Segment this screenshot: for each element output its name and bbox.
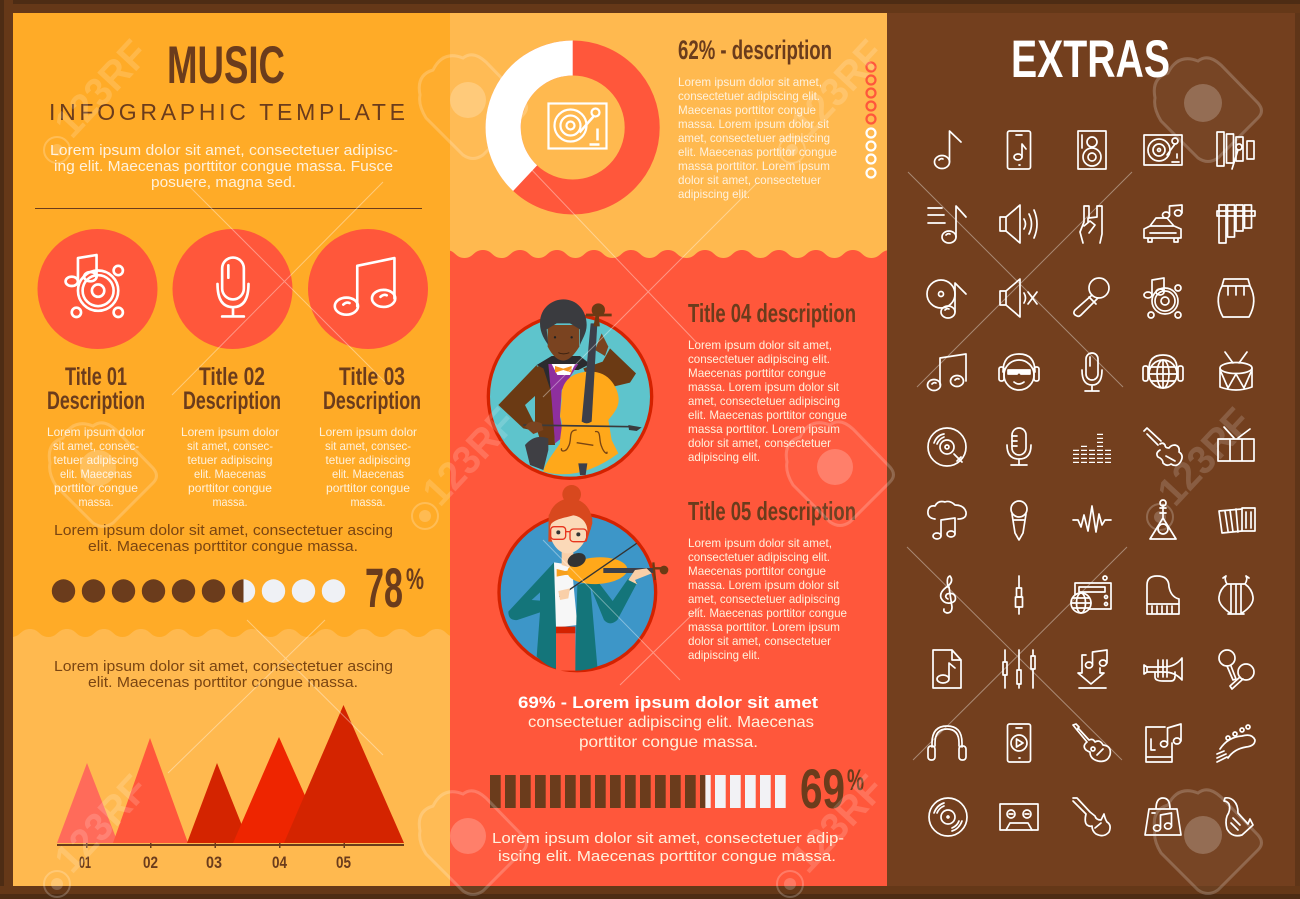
intro text: ing elit. Maecenas porttitor congue massa. Fusce bbox=[54, 158, 393, 175]
column 03 text: porttitor congue bbox=[326, 481, 410, 495]
column 01 text: tetuer adipiscing bbox=[54, 453, 138, 467]
icon: vintage microphone bbox=[1007, 428, 1031, 465]
text block: title 05 bbox=[688, 536, 847, 662]
icon circle 03: double music note bbox=[308, 229, 428, 349]
column 02 text: massa. bbox=[212, 495, 248, 509]
icon: trumpet bbox=[1144, 658, 1182, 681]
text block: title 04: dolor sit amet, consectetuer bbox=[688, 436, 831, 450]
column 03 text bbox=[319, 363, 421, 509]
watermark: stock photo marks: 123RF bbox=[46, 767, 157, 881]
icon: music note bbox=[934, 131, 961, 168]
icon: turntable bbox=[548, 104, 606, 148]
icon: cassette bbox=[1000, 804, 1038, 830]
illustration: violinist bbox=[499, 485, 668, 671]
icon: turntable bbox=[1144, 135, 1182, 165]
78 percent figure: 78 bbox=[365, 556, 403, 619]
column 03 text: Description bbox=[323, 387, 421, 415]
triangle chart: 02 bbox=[143, 853, 158, 872]
triangle chart: 03 bbox=[206, 853, 222, 872]
column 03 text: tetuer adipiscing bbox=[326, 453, 410, 467]
icon: music file bbox=[933, 650, 961, 688]
watermark: stock photo marks: 123RF bbox=[782, 767, 893, 881]
icon: book with note bbox=[1146, 724, 1181, 762]
column 01 text: Lorem ipsum dolor bbox=[47, 425, 145, 439]
column 01 text: Title 01 bbox=[65, 363, 127, 391]
icon: radio globe bbox=[1071, 576, 1111, 613]
dot progress 78 percent bbox=[52, 579, 345, 603]
text block: 62 percent: dolor sit amet, consectetuer bbox=[678, 173, 821, 187]
column 01 text: elit. Maecenas bbox=[60, 467, 132, 481]
triangle chart: 05 bbox=[336, 853, 351, 872]
icon: phone play bbox=[1008, 724, 1030, 762]
icon: grand piano bbox=[1147, 576, 1179, 614]
text block: title 04: Maecenas porttitor congue bbox=[688, 366, 826, 380]
text block: 62 percent: massa. Lorem ipsum dolor sit bbox=[678, 117, 830, 131]
text block: 62 percent: Maecenas porttitor congue bbox=[678, 103, 816, 117]
bottom text: iscing elit. Maecenas porttitor congue massa. bbox=[498, 848, 836, 865]
icon: saxophone bbox=[1224, 798, 1253, 836]
text block: 62 percent: consectetuer adipiscing elit. bbox=[678, 89, 820, 103]
column 02 text: porttitor congue bbox=[188, 481, 272, 495]
icon: shopping bag with notes bbox=[1145, 798, 1181, 835]
text block: title 05: adipiscing elit. bbox=[688, 648, 760, 662]
icon: conga drum bbox=[1218, 279, 1254, 317]
column 02 text bbox=[181, 363, 281, 509]
icon: microphone bbox=[1074, 278, 1109, 316]
icon: vinyl record bbox=[929, 798, 967, 836]
bar progress 69 percent bbox=[490, 775, 786, 808]
column 03 text: Lorem ipsum dolor bbox=[319, 425, 417, 439]
column 02 text: sit amet, consec- bbox=[187, 439, 273, 453]
text block: 62 percent: adipiscing elit. bbox=[678, 187, 750, 201]
panel: centre red background with wavy top bbox=[428, 250, 908, 890]
icon: violin bbox=[1144, 428, 1182, 465]
triangle chart: 01 bbox=[79, 853, 91, 872]
icon: drum bbox=[1220, 352, 1252, 390]
column 03 text: sit amet, consec- bbox=[325, 439, 411, 453]
column 01 text: Description bbox=[47, 387, 145, 415]
column 01 text: massa. bbox=[78, 495, 114, 509]
column 02 text: tetuer adipiscing bbox=[188, 453, 272, 467]
text above dots bbox=[54, 522, 393, 555]
text block: title 04: massa. Lorem ipsum dolor sit bbox=[688, 380, 840, 394]
text above triangle chart: elit. Maecenas porttitor congue massa. bbox=[88, 674, 358, 691]
icon: globe headphones bbox=[1143, 355, 1183, 388]
panel: right brown extras background bbox=[887, 0, 1300, 899]
text block: 69 percent: consectetuer adipiscing elit. Maecenas bbox=[528, 714, 814, 731]
column 01 text: porttitor congue bbox=[54, 481, 138, 495]
illustration: cellist bbox=[488, 299, 652, 478]
text block: title 05: dolor sit amet, consectetuer bbox=[688, 634, 831, 648]
text block: title 05: massa. Lorem ipsum dolor sit bbox=[688, 578, 840, 592]
text block: title 04 bbox=[688, 338, 847, 464]
icon: DJ face bbox=[999, 354, 1039, 390]
icon: speaker bbox=[1078, 131, 1106, 169]
text above dots: Lorem ipsum dolor sit amet, consectetuer ascing bbox=[54, 522, 393, 539]
column 03 text: Title 03 bbox=[339, 363, 405, 391]
text block: 62 percent: amet, consectetuer adipiscing bbox=[678, 131, 830, 145]
column 01 text bbox=[47, 363, 145, 509]
text block: 62 percent: massa porttitor. Lorem ipsum bbox=[678, 159, 830, 173]
icon circle 01: speaker with notes bbox=[38, 229, 158, 349]
icon: cloud with notes bbox=[928, 501, 966, 539]
icon: hand microphone bbox=[1011, 501, 1027, 540]
subtitle: INFOGRAPHIC TEMPLATE bbox=[49, 99, 405, 125]
panel: left lower background with wavy top bbox=[12, 629, 456, 890]
intro text: posuere, magna sed. bbox=[151, 174, 296, 191]
bottom text: Lorem ipsum dolor sit amet, consectetuer adip- bbox=[492, 830, 844, 847]
icon: studio microphone bbox=[1082, 353, 1102, 391]
column 02 text: Description bbox=[183, 387, 281, 415]
icon: maracas bbox=[1219, 650, 1254, 689]
ring dots bbox=[866, 62, 876, 178]
watermark: stock photo marks: 123RF bbox=[782, 32, 893, 146]
icon: download note bbox=[1078, 650, 1107, 688]
text above dots: elit. Maecenas porttitor congue massa. bbox=[88, 538, 358, 555]
triangle chart: 04 bbox=[272, 853, 287, 872]
icon: acoustic guitar bbox=[1073, 724, 1110, 761]
icon: mixer sliders bbox=[1003, 650, 1035, 688]
text block: title 04: massa porttitor. Lorem ipsum bbox=[688, 422, 840, 436]
icon circle 02: microphone bbox=[172, 229, 292, 349]
text block: 62 percent: Lorem ipsum dolor sit amet, bbox=[678, 75, 822, 89]
text block: title 05: amet, consectetuer adipiscing bbox=[688, 592, 840, 606]
panel: centre top background bbox=[450, 13, 887, 258]
title: MUSIC bbox=[167, 36, 285, 95]
heading: title 04: Title 04 description bbox=[688, 298, 856, 328]
triangle chart bbox=[57, 705, 404, 872]
heading: title 05: Title 05 description bbox=[688, 496, 856, 526]
icon: phone with note bbox=[1008, 131, 1030, 169]
icon: playlist note bbox=[928, 206, 966, 243]
icon: drum kit bbox=[1218, 427, 1254, 461]
text block: 62 percent: elit. Maecenas porttitor congue bbox=[678, 145, 837, 159]
panel: left top background bbox=[0, 0, 450, 640]
69 percent figure: % bbox=[847, 764, 864, 797]
icon: vinyl bbox=[928, 428, 966, 466]
icon: equalizer bbox=[1076, 432, 1108, 463]
icon: lyre bbox=[1219, 576, 1253, 614]
icon: accordion bbox=[1219, 508, 1255, 533]
icon: pan flute bbox=[1217, 205, 1255, 243]
watermark: stock photo marks: 123RF bbox=[414, 400, 525, 514]
watermark: stock photo marks: 123RF bbox=[1149, 400, 1260, 514]
text block: title 04: elit. Maecenas porttitor congue bbox=[688, 408, 847, 422]
column 02 text: Title 02 bbox=[199, 363, 265, 391]
text block: title 04: consectetuer adipiscing elit. bbox=[688, 352, 830, 366]
text block: title 05: massa porttitor. Lorem ipsum bbox=[688, 620, 840, 634]
column 01 text: sit amet, consec- bbox=[53, 439, 139, 453]
icon: speaker mute bbox=[1000, 279, 1037, 317]
text block: title 04: amet, consectetuer adipiscing bbox=[688, 394, 840, 408]
icon: car with note bbox=[1144, 205, 1182, 242]
text block: title 05: consectetuer adipiscing elit. bbox=[688, 550, 830, 564]
column 02 text: Lorem ipsum dolor bbox=[181, 425, 279, 439]
icon: treble clef bbox=[941, 576, 955, 613]
icon: double note bbox=[928, 354, 966, 390]
icon: headphones bbox=[928, 726, 966, 760]
icon: speaker with notes bbox=[1144, 278, 1181, 318]
bottom text bbox=[492, 830, 844, 865]
heading: 62 percent description: 62% - description bbox=[678, 35, 832, 65]
text block: 69 percent: porttitor congue massa. bbox=[579, 734, 758, 751]
column 02 text: elit. Maecenas bbox=[194, 467, 266, 481]
icon: balalaika bbox=[1150, 500, 1176, 539]
column 03 text: elit. Maecenas bbox=[332, 467, 404, 481]
text block: title 04: Lorem ipsum dolor sit amet, bbox=[688, 338, 832, 352]
donut chart 62 percent bbox=[486, 40, 642, 197]
text block: title 04: adipiscing elit. bbox=[688, 450, 760, 464]
intro text: Lorem ipsum dolor sit amet, consectetuer adipisc- bbox=[50, 142, 398, 159]
icon: guitar headstock bbox=[1217, 725, 1255, 762]
78 percent figure: % bbox=[406, 563, 424, 596]
icon: audio jack bbox=[1016, 576, 1022, 614]
icon: CD with note bbox=[927, 280, 966, 318]
text above triangle chart bbox=[54, 658, 393, 691]
text block: 69 percent bbox=[518, 693, 818, 751]
icon: electric guitar bbox=[1073, 798, 1110, 836]
heading: extras: EXTRAS bbox=[1011, 30, 1170, 89]
watermark: stock photo marks: 123RF bbox=[46, 32, 157, 146]
icon grid: extras bbox=[927, 131, 1255, 836]
text above triangle chart: Lorem ipsum dolor sit amet, consectetuer ascing bbox=[54, 658, 393, 675]
icon: xylophone bbox=[1217, 132, 1254, 169]
icon: speaker sound bbox=[1000, 205, 1037, 243]
text block: 62 percent bbox=[678, 75, 837, 201]
icon: rock hand bbox=[1080, 206, 1102, 243]
69 percent figure: 69 bbox=[800, 757, 845, 820]
icon: sound wave bbox=[1073, 506, 1111, 532]
intro text bbox=[50, 142, 398, 191]
text block: title 05: Maecenas porttitor congue bbox=[688, 564, 826, 578]
column 03 text: massa. bbox=[350, 495, 386, 509]
text block: 69 percent: 69% - Lorem ipsum dolor sit amet bbox=[518, 693, 818, 712]
text block: title 05: elit. Maecenas porttitor congue bbox=[688, 606, 847, 620]
text block: title 05: Lorem ipsum dolor sit amet, bbox=[688, 536, 832, 550]
